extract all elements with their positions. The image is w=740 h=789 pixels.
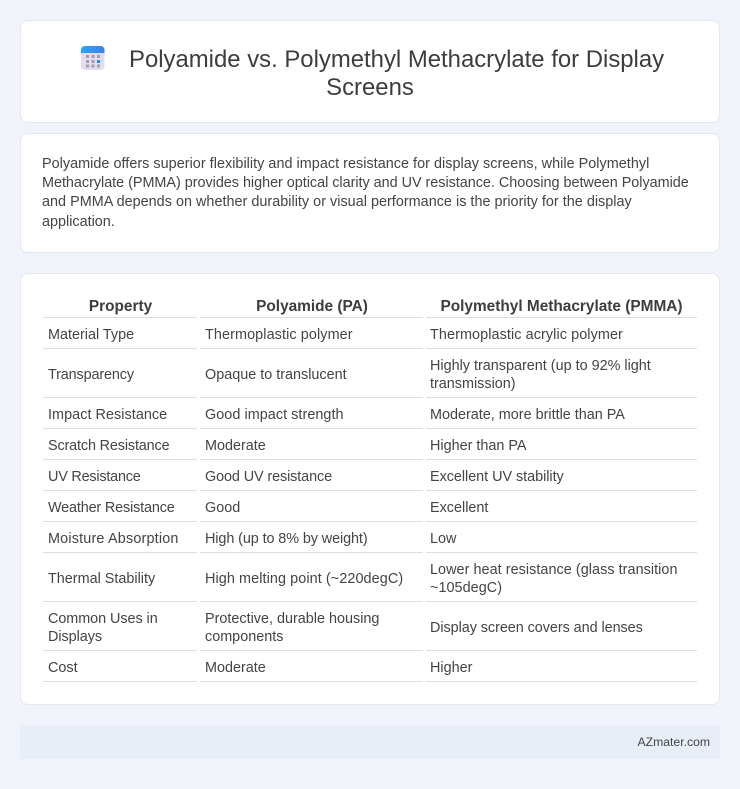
row: UV resistance: Good UV resistance [205,469,332,485]
row: material type: Thermoplastic polymer [205,327,353,343]
title [129,46,664,101]
row: thermal stability: High melting point (~220degC) [205,571,403,587]
title: Screens [326,74,414,101]
panel: comparison table card [20,273,720,705]
footer bar [20,725,720,759]
row: cost: Higher [430,660,472,676]
row: transparency: Highly transparent (up to 92% light [430,358,651,374]
row: material type: Material Type [48,327,134,343]
row: common uses in displays: Display screen covers and lenses [430,620,643,636]
row: impact resistance: Moderate, more brittle than PA [430,407,625,423]
table header: Property [89,298,152,315]
row: moisture absorption: Moisture Absorption [48,531,179,547]
row: scratch resistance: Scratch Resistance [48,438,169,454]
row: scratch resistance: Higher than PA [430,438,527,454]
panel: title card [20,20,720,123]
row: UV resistance: Excellent UV stability [430,469,564,485]
row: moisture absorption: High (up to 8% by weight) [205,531,368,547]
panel: summary card [20,133,720,253]
summary text: Methacrylate (PMMA) provides higher optical clarity and UV resistance. Choosing between Polyamide [42,175,689,191]
row: thermal stability: ~105degC) [430,580,502,596]
row: impact resistance: Good impact strength [205,407,344,423]
row: moisture absorption: Low [430,531,456,547]
row: scratch resistance [48,438,527,454]
row: common uses in displays: Protective, durable housing [205,611,379,627]
row: weather resistance: Good [205,500,240,516]
table header: Polymethyl Methacrylate (PMMA) [440,298,683,315]
row: cost: Moderate [205,660,266,676]
row: UV resistance: UV Resistance [48,469,141,485]
row: weather resistance: Weather Resistance [48,500,175,516]
row: transparency: Opaque to translucent [205,367,347,383]
row: material type: Thermoplastic acrylic polymer [430,327,623,343]
row: weather resistance: Excellent [430,500,488,516]
summary text: and PMMA depends on whether durability or visual performance is the priority for the display [42,194,632,210]
row: thermal stability: Lower heat resistance (glass transition [430,562,678,578]
row: thermal stability [48,562,678,596]
row: thermal stability: Thermal Stability [48,571,155,587]
row: scratch resistance: Moderate [205,438,266,454]
footer credit: AZmater.com [638,735,710,749]
row: transparency: transmission) [430,376,516,392]
row: cost: Cost [48,660,78,676]
row: weather resistance [48,500,488,516]
row: common uses in displays: components [205,629,283,645]
row: transparency [48,358,651,392]
row: material type [48,327,623,343]
table header: Polyamide (PA) [256,298,368,315]
summary text: application. [42,214,115,230]
summary text: Polyamide offers superior flexibility and impact resistance for display screens, while Polymethyl [42,156,649,172]
row: impact resistance: Impact Resistance [48,407,167,423]
table header [89,298,683,315]
row: UV resistance [48,469,564,485]
row: cost [48,660,472,676]
row: transparency: Transparency [48,367,134,383]
title: Polyamide vs. Polymethyl Methacrylate for Display [129,46,664,73]
row: common uses in displays [48,611,643,645]
summary text [42,156,689,230]
row: common uses in displays: Displays [48,629,102,645]
row: common uses in displays: Common Uses in [48,611,158,627]
row: moisture absorption [48,531,456,547]
icon: calendar [81,46,104,70]
row: impact resistance [48,407,625,423]
